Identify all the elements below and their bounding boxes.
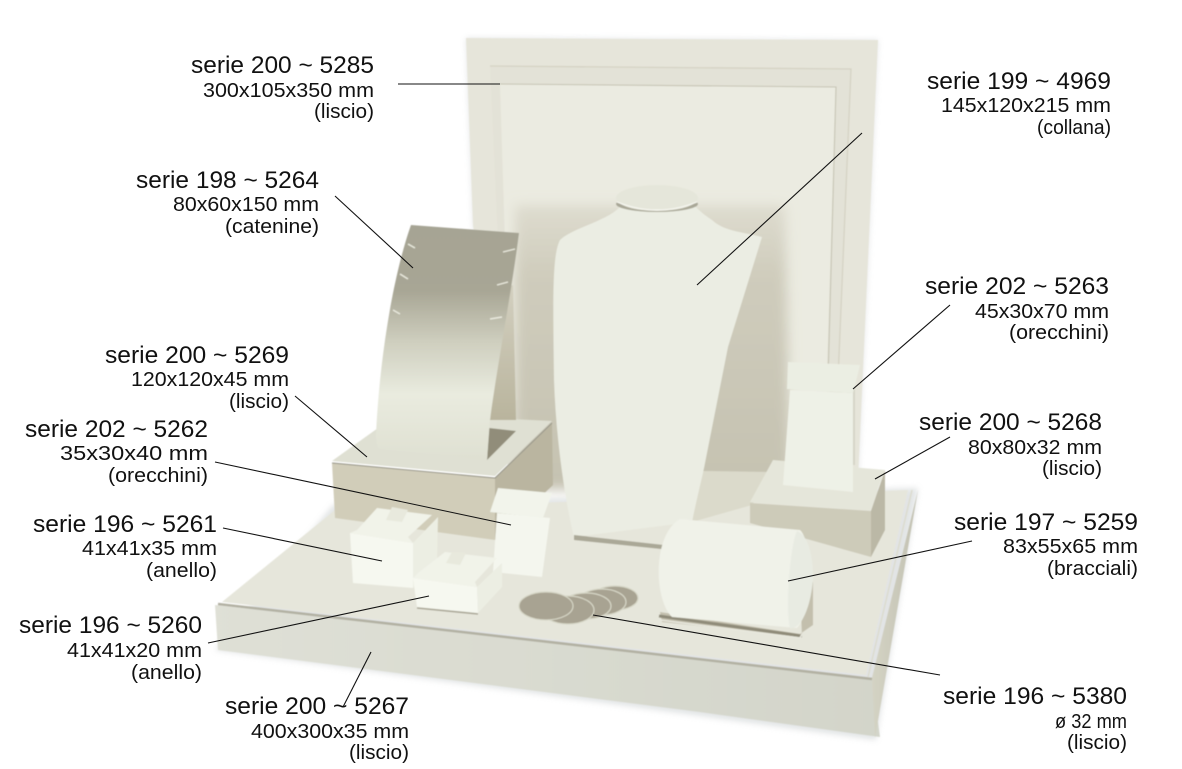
label: 5263: 45x30x70 mm bbox=[975, 300, 1109, 323]
leader line: 5267 bbox=[343, 652, 371, 707]
label: 5260: 41x41x20 mm bbox=[67, 639, 202, 662]
label: 5267: serie 200 ~ 5267 bbox=[225, 693, 409, 720]
label: 5259: (bracciali) bbox=[1047, 557, 1138, 580]
label: 5285: 300x105x350 mm bbox=[203, 79, 374, 102]
label: 5269: (liscio) bbox=[229, 390, 289, 413]
label: 5267 bbox=[225, 693, 409, 764]
panel: box 5260 bbox=[413, 552, 502, 614]
label: 4969: (collana) bbox=[1037, 116, 1111, 139]
label: 5262: (orecchini) bbox=[108, 464, 208, 487]
panel: box 5269 bbox=[332, 418, 553, 540]
label: 5260: serie 196 ~ 5260 bbox=[19, 612, 202, 639]
label: 5264: 80x60x150 mm bbox=[173, 193, 319, 216]
panel: back support bbox=[490, 285, 516, 420]
leader line: 5261 bbox=[223, 528, 382, 561]
label: 5268 bbox=[919, 409, 1102, 480]
panel: bracelet cylinder 5259 bbox=[659, 519, 813, 638]
label: 5380: (liscio) bbox=[1067, 731, 1127, 754]
label: 5268: 80x80x32 mm bbox=[968, 436, 1102, 459]
leader line: 4969 bbox=[697, 133, 862, 285]
label: 5380: ø 32 mm bbox=[1055, 710, 1127, 733]
label: 5269: serie 200 ~ 5269 bbox=[105, 342, 289, 369]
leader line: 5269 bbox=[295, 396, 367, 457]
panel: backdrop 5285 bbox=[466, 38, 878, 490]
label: 5267: 400x300x35 mm bbox=[251, 720, 409, 743]
label: 5262: 35x30x40 mm bbox=[60, 442, 208, 465]
leader line: 5380 bbox=[593, 615, 940, 675]
label: 5263: serie 202 ~ 5263 bbox=[925, 273, 1109, 300]
label: 5263: (orecchini) bbox=[1009, 321, 1109, 344]
label: 5259: serie 197 ~ 5259 bbox=[954, 509, 1138, 536]
label: 5264: serie 198 ~ 5264 bbox=[136, 167, 319, 194]
panel: base tray 5267 bbox=[215, 488, 918, 740]
panel: coins 5380 bbox=[519, 586, 638, 624]
label: 5268: (liscio) bbox=[1042, 457, 1102, 480]
label: 5259 bbox=[954, 509, 1138, 580]
label: 5269: 120x120x45 mm bbox=[131, 368, 289, 391]
panel: box 5261 bbox=[350, 507, 438, 588]
panel: bust 4969 bbox=[553, 185, 762, 553]
leader line: 5259 bbox=[788, 541, 972, 581]
label: 5285: (liscio) bbox=[314, 100, 374, 123]
label: 5264: (catenine) bbox=[225, 215, 319, 238]
leader line: 5264 bbox=[335, 196, 413, 268]
label: 5259: 83x55x65 mm bbox=[1003, 535, 1138, 558]
label: 5260: (anello) bbox=[131, 661, 202, 684]
label: 4969: serie 199 ~ 4969 bbox=[927, 68, 1111, 95]
panel: box 5268 bbox=[750, 460, 885, 557]
label: 5262: serie 202 ~ 5262 bbox=[25, 416, 208, 443]
panel: earring display 5263 bbox=[783, 362, 860, 492]
leader line: 5260 bbox=[208, 596, 429, 643]
label: 5380 bbox=[943, 683, 1127, 754]
leader line: 5285 bbox=[398, 83, 500, 85]
leader line: 5268 bbox=[875, 437, 950, 479]
panel: necklace display 5264 bbox=[376, 225, 519, 460]
label: 5269 bbox=[105, 342, 289, 413]
label: 5380: serie 196 ~ 5380 bbox=[943, 683, 1127, 710]
label: 5264 bbox=[136, 167, 319, 238]
label: 5263 bbox=[925, 273, 1109, 344]
leader line: 5263 bbox=[853, 305, 950, 389]
label: 5261 bbox=[33, 511, 217, 582]
label: 5268: serie 200 ~ 5268 bbox=[919, 409, 1102, 436]
panel: bust base bbox=[692, 471, 772, 522]
label: 5285: serie 200 ~ 5285 bbox=[191, 52, 374, 79]
label: 5260 bbox=[19, 612, 202, 684]
leader line: 5262 bbox=[215, 462, 511, 525]
photo: jewellery display set bbox=[215, 38, 918, 740]
label: 4969: 145x120x215 mm bbox=[941, 94, 1111, 117]
label: 5261: 41x41x35 mm bbox=[82, 537, 217, 560]
label: 5267: (liscio) bbox=[349, 741, 409, 764]
label: 5261: (anello) bbox=[146, 559, 217, 582]
label: 5285 bbox=[191, 52, 374, 123]
panel: earring display 5262 bbox=[490, 488, 552, 577]
label: 4969 bbox=[927, 68, 1111, 139]
label: 5262 bbox=[25, 416, 208, 487]
label: 5261: serie 196 ~ 5261 bbox=[33, 511, 217, 538]
